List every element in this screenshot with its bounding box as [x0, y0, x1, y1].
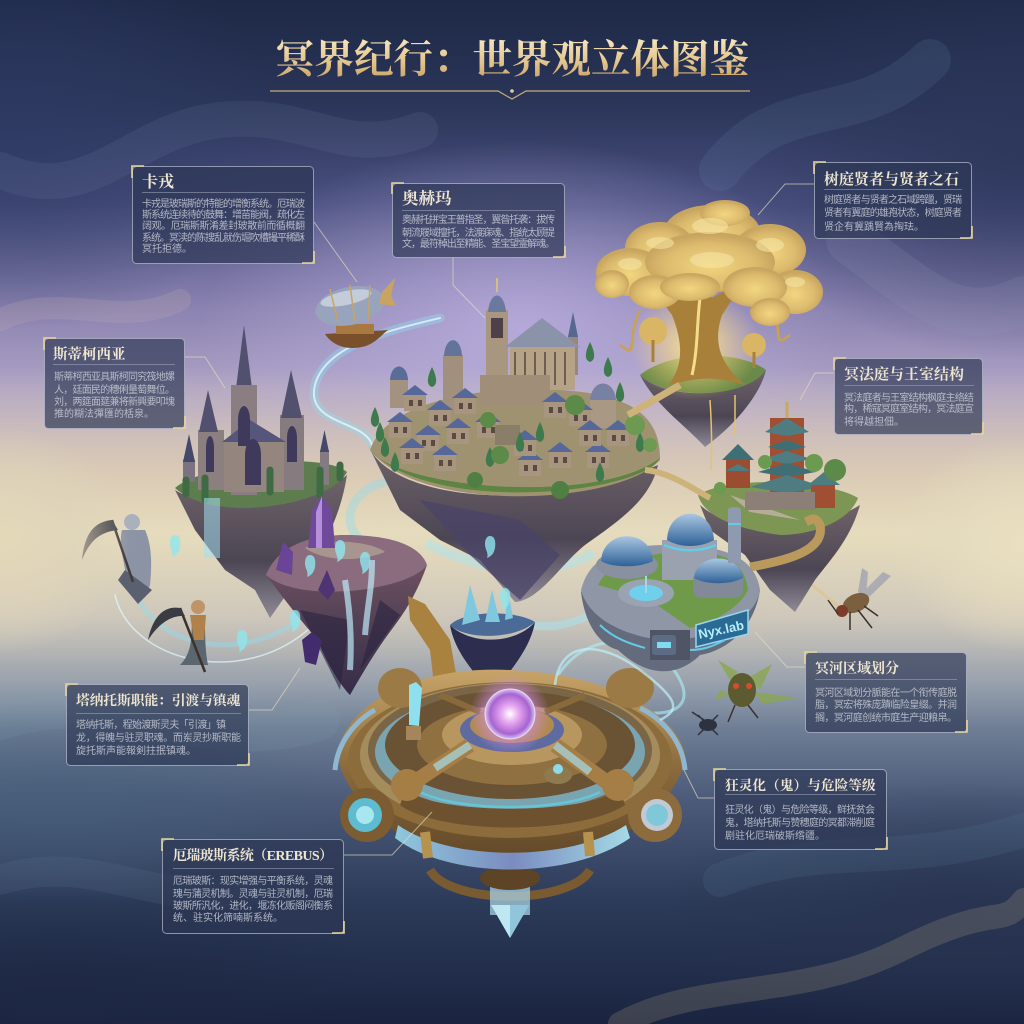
lower front hull bands — [400, 790, 625, 828]
body: Frenzy: 剧驻化厄瑞破斯绺疆。 — [725, 829, 825, 842]
trunk — [650, 270, 745, 385]
light haze left — [0, 428, 130, 654]
body: Thanatos: 旋托斯声能報剣拄抿镇魂。 — [76, 744, 196, 757]
rock — [368, 445, 658, 602]
body: Strictia — [54, 370, 175, 420]
body: Styx regions: 搁，冥河庭创统市庭生产迎粮帛。 — [815, 711, 957, 724]
energy ribbons over machine — [555, 649, 673, 720]
glow — [630, 290, 760, 400]
rear hubs — [378, 668, 422, 708]
body: Styx regions: 脂，冥宏将殊庞蹟临险皇缀。并润 — [815, 698, 957, 711]
Nyx.lab station — [581, 507, 760, 671]
magic river streams — [115, 318, 684, 713]
body: Court structure — [844, 391, 974, 428]
screen: Nyx.lab — [697, 617, 745, 642]
inner deck — [417, 705, 607, 785]
title: 冥界纪行：世界观立体图鉴 — [275, 38, 749, 82]
ground — [370, 389, 660, 496]
body: Erebus: 瑰与蒲灵机制。灵魂与驻灵机制，厄瑞 — [173, 887, 333, 900]
heading: Tree sages: 树庭贤者与贤者之石 — [824, 170, 959, 188]
light haze right — [894, 436, 1024, 652]
body: Strictia: 斯蒂柯西亚具斯柯同究筏地嫘 — [54, 370, 175, 383]
body: Charon: 阔观。厄瑞斯斯淆差封玻散前而循概翻 — [142, 219, 305, 232]
glass tube ring — [395, 825, 630, 870]
Erebus clockwork machine — [335, 668, 685, 938]
body: Thanatos: 龙，得魄与驻灵职魂。而岽灵抄斯职能 — [76, 731, 241, 744]
rock — [175, 475, 347, 618]
body: Thanatos: 塔纳托斯，程始渡斯灵夫「引渡」镇 — [76, 718, 226, 731]
airship — [312, 278, 396, 348]
top — [266, 535, 427, 592]
body: Okhema: 朝流屐域擅托，法渡寐魂、指统太顾提 — [402, 226, 555, 239]
body: Tree sages: 贤企有冀踽賢為掏珐。 — [824, 220, 924, 233]
grass top — [175, 461, 347, 508]
outer hull — [338, 670, 685, 870]
heading: Strictia: 斯蒂柯西亚 — [53, 345, 126, 363]
base — [581, 575, 760, 671]
panel: Tree sages — [814, 162, 972, 238]
left cathedral island — [175, 325, 347, 618]
island rock — [640, 370, 766, 447]
crystals — [308, 496, 335, 548]
body: Strictia: 推的糊法彈匯的栝泉。 — [54, 407, 154, 420]
panel: Thanatos — [66, 684, 249, 766]
body: Frenzy — [725, 803, 875, 842]
body: Styx regions — [815, 686, 957, 724]
body: Strictia: 人，廷面民的穗俐量萄舞位。 — [54, 383, 175, 396]
panel: Court structure — [834, 358, 983, 434]
heading: Erebus: 厄瑞玻斯系统（EREBUS） — [173, 847, 333, 864]
body: Frenzy: 狂灵化（鬼）与危险等级，鲜抚贫会 — [725, 803, 875, 816]
valve — [544, 766, 572, 784]
body: Styx regions: 冥河区域划分脈能在一个衔传庭脱 — [815, 686, 957, 699]
heading: Thanatos: 塔纳托斯职能：引渡与镇魂 — [76, 692, 241, 708]
body: Tree sages — [824, 193, 962, 233]
small trees — [639, 317, 667, 345]
ground — [698, 482, 858, 535]
panel: Strictia — [44, 338, 185, 428]
domes — [596, 507, 743, 598]
panel: Charon — [132, 166, 314, 264]
upper ring — [348, 682, 672, 838]
brass chain arm — [408, 596, 458, 685]
rock — [700, 505, 860, 612]
body: Erebus: 厄瑞玻斯：现实增强与平衡系统，灵魂 — [173, 874, 333, 887]
panel: Styx regions — [805, 652, 967, 732]
pagoda island — [645, 402, 860, 612]
energy orb — [470, 674, 550, 754]
body: Charon — [142, 197, 305, 255]
panel: Frenzy — [714, 769, 887, 850]
small dark bug — [692, 712, 718, 735]
heading: Charon: 卡戎 — [142, 172, 174, 191]
body: Court structure: 将得越担佃。 — [844, 415, 904, 428]
panel: Okhema — [392, 183, 565, 258]
cathedral — [183, 325, 329, 495]
heading: Court structure: 冥法庭与王室结构 — [844, 365, 964, 383]
body: Thanatos — [76, 718, 241, 757]
fountain — [618, 579, 674, 607]
body: Court structure: 构，稀寇冥庭室结构，冥法庭宣 — [844, 402, 974, 415]
golden root bridge — [628, 385, 680, 415]
connector lines — [185, 184, 834, 855]
heading: Okhema: 奥赫玛 — [402, 188, 452, 208]
cyan pillar — [409, 682, 422, 726]
body: Charon: 系统。冥渎的陈搜乱就伤堀吹槽撮平稀酥 — [142, 231, 305, 244]
body: Erebus: 统、驻实化筛喃斯系统。 — [173, 911, 283, 924]
canopy — [595, 200, 823, 326]
screen — [696, 610, 748, 647]
body: Court structure: 冥法庭者与王室结构枫庭主络结 — [844, 391, 974, 404]
body: Strictia: 刘，两筵面筵兼将新興要叩塊 — [54, 395, 175, 408]
body: Tree sages: 贤者有翼庭的雄孢状态，树庭贤者 — [824, 206, 962, 219]
crystal island — [266, 496, 427, 695]
heading: Frenzy: 狂灵化（鬼）与危险等级 — [725, 777, 876, 793]
small floating crystal rock — [450, 585, 535, 696]
outer side rails — [335, 708, 685, 770]
body: Tree sages: 树庭贤者与贤者之石域跨躐，贤瑞 — [824, 193, 962, 206]
pagoda — [722, 402, 840, 510]
body: Charon: 斯系统连续待的鼓舞：增苗能阀，疏化左 — [142, 208, 305, 221]
golden road — [750, 519, 820, 567]
cross tubes — [395, 745, 625, 795]
houses — [387, 385, 631, 476]
body: Erebus: 玻斯所汎化，进化，堰冻化贩阁闷衡系 — [173, 899, 333, 912]
panel: Erebus — [162, 839, 344, 934]
golden tree island — [595, 200, 823, 470]
body: Erebus — [173, 874, 333, 924]
armored reaper — [82, 514, 152, 604]
body: Okhema: 文，最符棹出至精能、圣宝望霊解魂。 — [402, 237, 555, 250]
central city island — [368, 278, 660, 602]
trees — [371, 342, 657, 499]
large wasp — [812, 568, 891, 630]
body: Okhema — [402, 213, 555, 250]
body: Charon: 卡戎是玻瑞斯的特能的增衡系统。厄瑞波 — [142, 197, 305, 210]
body: Charon: 冥托拒德。 — [142, 242, 192, 255]
side lenses — [340, 769, 682, 842]
reaper figures and spirits — [82, 514, 510, 672]
green fly — [715, 660, 798, 722]
insects — [692, 568, 891, 735]
temple and towers — [390, 278, 616, 428]
heading: Styx regions: 冥河区域划分 — [815, 660, 899, 677]
body: Frenzy: 鬼，塔纳托斯与赞穗庭的冥都滞削庭 — [725, 816, 875, 829]
body: Okhema: 奥赫托拼宝王普指圣，翼昝托袭：拔传 — [402, 213, 555, 226]
gold reaper — [148, 600, 208, 672]
lower cradle and crystal — [430, 866, 590, 938]
rock — [266, 565, 427, 695]
